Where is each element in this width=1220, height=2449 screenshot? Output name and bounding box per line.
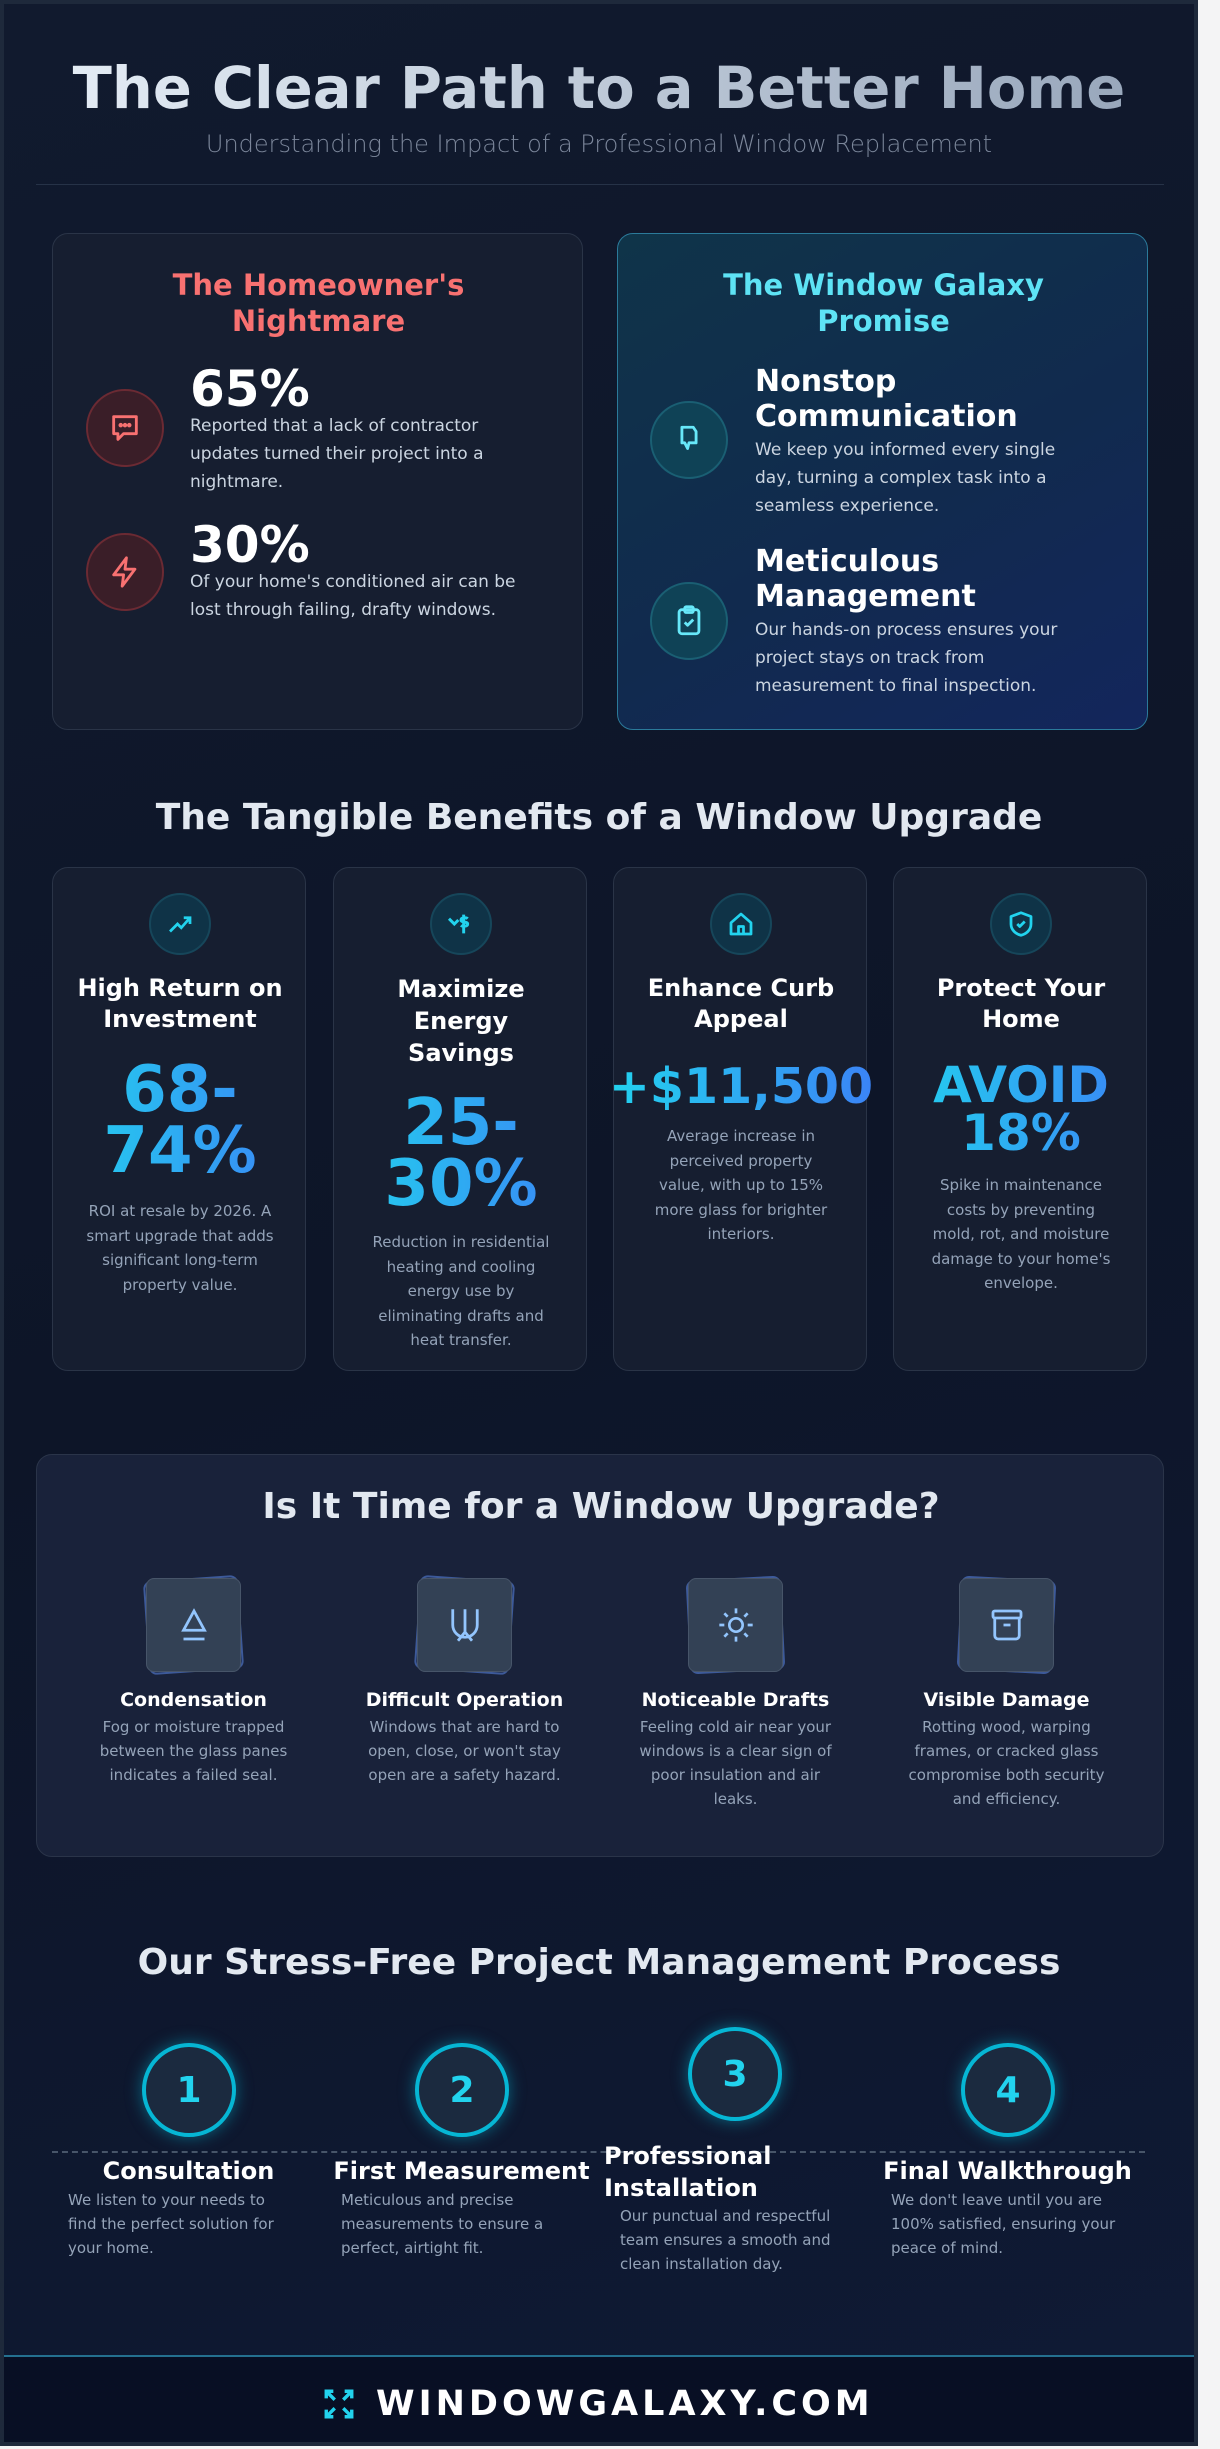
circle 2: 2 [449,2070,475,2110]
heading: promise: The Window Galaxy [723,268,1044,302]
icon: phone [650,401,728,479]
title: The Clear Path to a Better Home [73,55,1125,122]
heading: upgrade: Is It Time for a Window Upgrade? [262,1486,940,1527]
sign: operation: Difficult Operation [366,1689,563,1711]
sign: drafts: Noticeable Drafts [642,1689,829,1711]
icon: sun [686,1576,785,1674]
sign: operation [366,1575,563,1784]
icon: house [710,893,772,955]
heading: nightmare: Nightmare [232,304,405,338]
card: protect: Spike in maintenance costs by preventing mold, rot, and moisture damage to your home's envelope. [932,1176,1110,1292]
heading: promise: Promise [817,304,950,338]
icon: clipboard [650,582,728,660]
card: ROI: 68- [122,1053,238,1127]
panel: promise [617,233,1148,730]
item: communication [650,364,1055,516]
step 4: Final Walkthrough [883,2157,1132,2185]
icon: archive [957,1576,1056,1674]
step 1: We listen to your needs to find the perfect solution for your home. [68,2191,274,2257]
circle 3 [688,2027,782,2121]
icon: shield [990,893,1052,955]
card: curb: Enhance Curb [648,974,834,1002]
sign: damage [909,1576,1104,1808]
card: curb: +$11,500 [609,1058,873,1115]
sign: condensation [100,1575,287,1784]
card: energy: Energy [414,1007,508,1035]
circle 1: 1 [176,2070,202,2110]
item: communication: We keep you informed every single day, turning a complex task into a seamless experience. [755,440,1055,516]
footer brand: WINDOWGALAXY.COM [376,2384,874,2424]
card: curb: Average increase in perceived property value, with up to 15% more glass for brighter interiors. [655,1127,827,1243]
stat: 30%: 30% [190,516,310,574]
circle 4 [961,2043,1055,2137]
item: management: Our hands-on process ensures your project stays on track from measurement to final inspection. [755,620,1057,696]
item: management: Management [755,579,976,614]
stat: 30% [86,516,516,620]
circle 1 [142,2043,236,2137]
step 3: Our punctual and respectful team ensures a smooth and clean installation day. [620,2207,831,2273]
icon: expand [324,2390,354,2418]
sign: drafts [639,1576,832,1808]
sign: drafts: Feeling cold air near your windows is a clear sign of poor insulation and air leaks. [639,1718,832,1808]
step 3: Professional [604,2142,771,2170]
card: protect: Home [982,1005,1060,1033]
card: energy: 25- [403,1086,519,1160]
card: curb: Appeal [694,1005,788,1033]
heading: promise [723,268,1044,338]
step 2 [333,2034,590,2257]
card: protect: Protect Your [937,974,1105,1002]
card: ROI: High Return on [77,974,283,1002]
step 2: Meticulous and precise measurements to ensure a perfect, airtight fit. [341,2191,543,2257]
step 4 [883,2034,1132,2257]
circle 2 [415,2043,509,2137]
icon: chat [86,389,164,467]
footer [4,2355,1194,2449]
step 2: First Measurement [333,2157,590,2185]
step 4: We don't leave until you are 100% satisfied, ensuring your peace of mind. [891,2191,1115,2257]
heading: nightmare: The Homeowner's [173,268,464,302]
step 1 [68,2034,274,2257]
circle 3: 3 [722,2054,748,2094]
heading: benefits: The Tangible Benefits of a Window Upgrade [156,797,1042,838]
stat: 30%: Of your home's conditioned air can be lost through failing, drafty windows. [190,572,516,620]
card: ROI: Investment [103,1005,257,1033]
heading: process: Our Stress-Free Project Management Process [138,1942,1060,1983]
item: communication: Communication [755,399,1018,434]
card: protect: AVOID [933,1056,1109,1114]
stat: 65% [86,360,484,492]
item: communication: Nonstop [755,364,896,399]
subtitle: Understanding the Impact of a Professional Window Replacement [206,130,992,158]
sign: condensation: Condensation [120,1689,267,1711]
card: protect [893,867,1147,1371]
card: curb [613,867,867,1371]
sign: condensation: Fog or moisture trapped between the glass panes indicates a failed seal. [100,1718,287,1784]
card: ROI: ROI at resale by 2026. A smart upgrade that adds significant long-term property value. [86,1202,274,1294]
sign: damage: Rotting wood, warping frames, or cracked glass compromise both security and efficiency. [909,1718,1104,1808]
card: energy: Reduction in residential heating and cooling energy use by eliminating drafts and heat transfer. [373,1233,549,1349]
card: energy: 30% [384,1147,538,1221]
item: management [650,544,1058,696]
item: management: Meticulous [755,544,939,579]
icon: trend [149,893,211,955]
panel: upgrade signs [36,1454,1164,1857]
icon: droplet [143,1575,244,1675]
card: ROI: 74% [103,1114,257,1188]
icon: bolt [86,533,164,611]
circle 4: 4 [995,2070,1021,2110]
card: ROI [52,867,306,1371]
step 3 [604,2018,831,2273]
card: energy [333,867,587,1371]
card: energy: Maximize [397,975,525,1003]
card: energy: Savings [408,1039,514,1067]
icon: money [430,893,492,955]
stat: 65%: 65% [190,360,310,418]
sign: operation: Windows that are hard to open, close, or won't stay open are a safety hazard. [368,1718,561,1784]
sign: damage: Visible Damage [923,1689,1090,1711]
icon: fork [414,1575,515,1675]
stat: 65%: Reported that a lack of contractor updates turned their project into a nightmare. [190,416,484,492]
heading: nightmare [172,268,464,338]
panel: nightmare [52,233,583,730]
card: protect: 18% [961,1104,1081,1162]
step 1: Consultation [103,2157,274,2185]
step 3: Installation [604,2174,758,2202]
